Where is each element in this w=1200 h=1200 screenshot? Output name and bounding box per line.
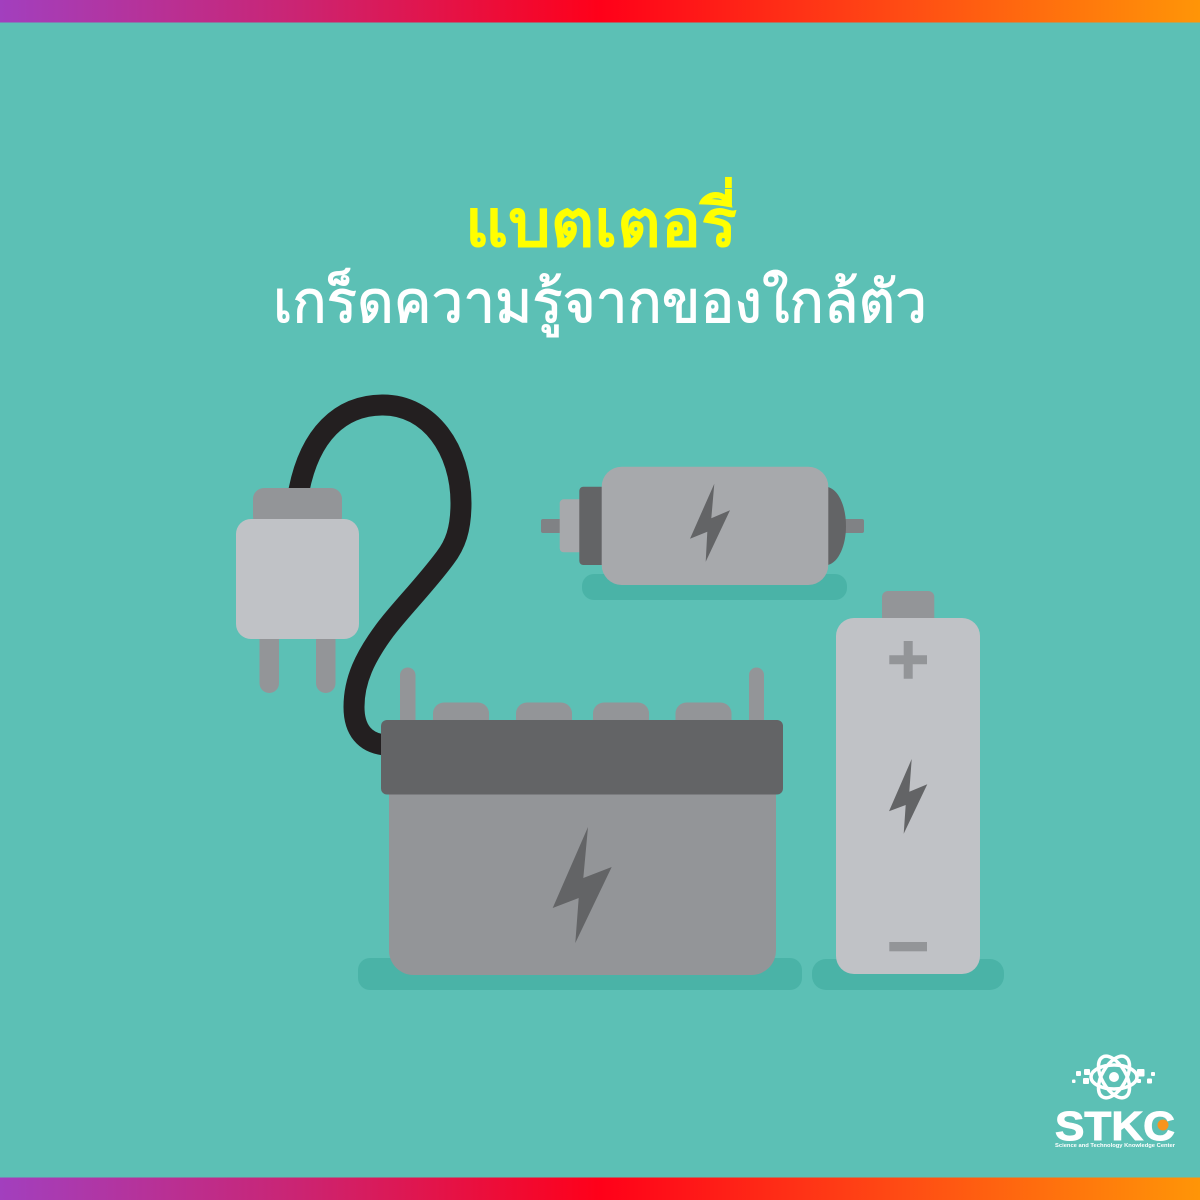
- plug prongs: [260, 630, 336, 693]
- title: เกร็ดความรู้จากของใกล้ตัว: [273, 268, 927, 337]
- plus sign: [889, 641, 927, 679]
- lightning bolt: [690, 484, 730, 562]
- lid: [381, 720, 783, 794]
- minus sign: [889, 942, 927, 951]
- icon: car battery: [358, 668, 802, 990]
- icon: AA battery: [812, 591, 1004, 990]
- logo side dots: [1072, 1069, 1155, 1084]
- title: [273, 176, 927, 337]
- terminal pins: [541, 519, 565, 533]
- shadow: [358, 958, 802, 990]
- title: แบตเตอรี่: [465, 176, 737, 260]
- body: [836, 618, 980, 974]
- shadow: [812, 959, 1004, 990]
- plug head: [236, 519, 359, 639]
- positive cap: [882, 591, 934, 631]
- top gradient bar: [0, 0, 1200, 22]
- icon: cylinder battery: [541, 467, 864, 600]
- lightning bolt: [889, 759, 927, 834]
- logo: STKC: [1055, 1051, 1176, 1149]
- lightning bolt: [553, 827, 612, 943]
- caps: [433, 702, 489, 738]
- cord: [299, 405, 461, 745]
- logo atom mark: [1091, 1051, 1137, 1103]
- right cap: [820, 487, 846, 565]
- bottom gradient bar: [0, 1178, 1200, 1200]
- body: [389, 785, 776, 975]
- terminal posts: [400, 668, 416, 738]
- logo wordmark: STKC: [1055, 1103, 1175, 1149]
- body: [602, 467, 828, 585]
- icon: power cord and plug: [236, 405, 461, 745]
- logo caption: Science and Technology Knowledge Center: [1055, 1143, 1176, 1149]
- plug neck: [253, 488, 342, 528]
- logo orange dot: [1158, 1120, 1168, 1130]
- shadow: [582, 574, 847, 600]
- left cap: [560, 499, 590, 552]
